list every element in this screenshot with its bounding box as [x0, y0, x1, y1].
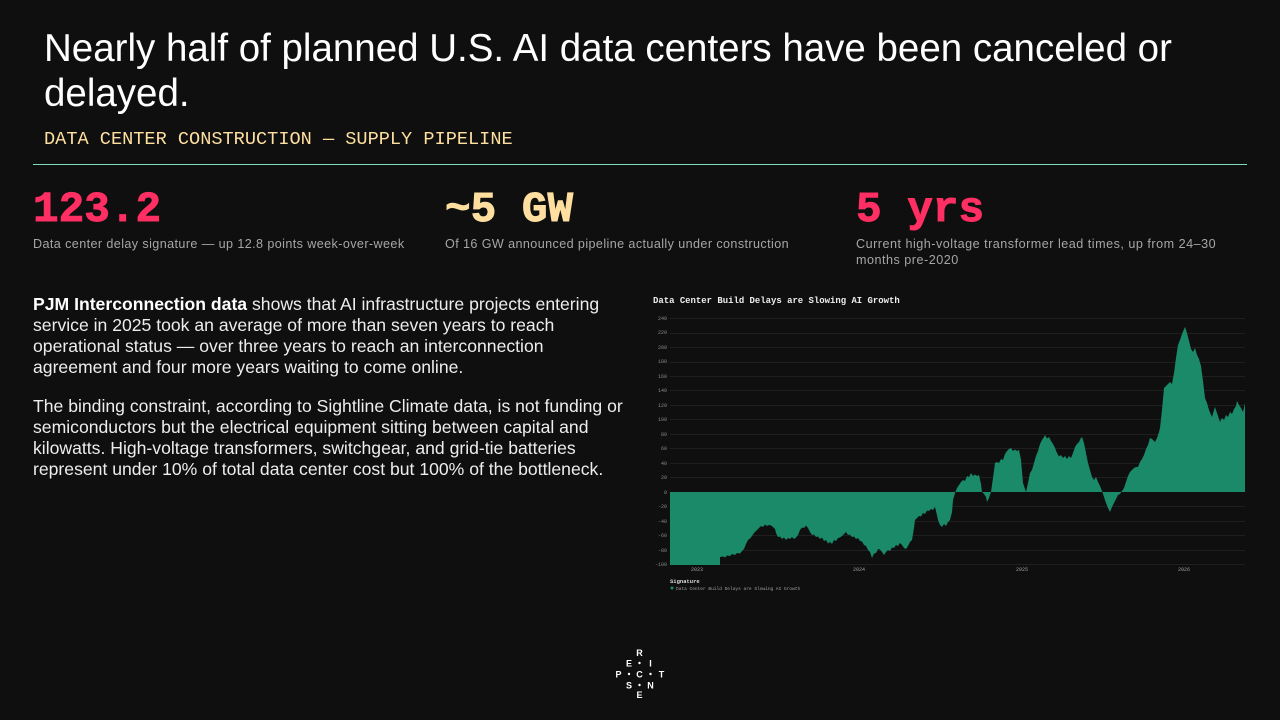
stat: under construction [445, 185, 789, 251]
y axis labels: 20 [661, 475, 667, 481]
y axis labels: -20 [658, 504, 667, 510]
x axis labels: 2026 [1178, 567, 1190, 573]
stat value: 123.2 [33, 185, 161, 234]
stat: transformer lead times [856, 185, 1216, 267]
title [44, 27, 1172, 115]
y axis labels: 60 [661, 446, 667, 452]
x axis labels: 2024 [853, 567, 865, 573]
x axis labels: 2023 [691, 567, 703, 573]
logo: wordmark grid: C [636, 670, 643, 680]
subtitle: DATA CENTER CONSTRUCTION — SUPPLY PIPELINE [44, 129, 513, 150]
logo: wordmark grid: P [615, 670, 622, 680]
x axis labels [691, 567, 1190, 573]
stat caption: months pre-2020 [856, 253, 959, 267]
y axis labels: 120 [658, 403, 667, 409]
y axis labels: -100 [655, 562, 667, 568]
y axis labels: 100 [658, 417, 667, 423]
text block: PJM data: operational status — over three years to reach an interconnection [33, 336, 544, 356]
text block: PJM data [33, 294, 599, 377]
text block: binding constraint: represent under 10% of total data center cost but 100% of the bottleneck. [33, 459, 603, 479]
chart title: Data Center Build Delays are Slowing AI Growth [653, 296, 900, 306]
signature area series [670, 327, 1245, 565]
logo: wordmark grid: I [649, 658, 652, 668]
text block: PJM data: service in 2025 took an average of more than seven years to reach [33, 315, 554, 335]
logo: wordmark grid: E [626, 658, 632, 668]
text block: binding constraint: The binding constraint, according to Sightline Climate data, is not funding or [33, 396, 623, 416]
title: Nearly half of planned U.S. AI data centers have been canceled or [44, 27, 1172, 70]
stat caption: Of 16 GW announced pipeline actually under construction [445, 237, 789, 251]
y axis labels: 180 [658, 359, 667, 365]
logo: wordmark grid: N [647, 680, 654, 690]
stat value: 5 yrs [856, 185, 984, 234]
y axis labels: 0 [664, 490, 667, 496]
legend [670, 578, 801, 592]
legend: Data Center Build Delays are Slowing AI Growth [676, 586, 801, 592]
text block: binding constraint [33, 396, 623, 479]
y axis labels: 160 [658, 374, 667, 380]
text block: binding constraint: kilowatts. High-voltage transformers, switchgear, and grid-tie batteries [33, 438, 576, 458]
area chart [653, 296, 1245, 592]
logo: wordmark grid: R [636, 648, 643, 658]
x axis labels: 2025 [1016, 567, 1028, 573]
y axis labels: -80 [658, 548, 667, 554]
y axis labels: 40 [661, 461, 667, 467]
stat caption: Data center delay signature — up 12.8 points week-over-week [33, 237, 405, 251]
logo: wordmark grid [615, 648, 665, 700]
y axis labels: 140 [658, 388, 667, 394]
legend: Signature [670, 578, 700, 585]
logo: wordmark grid: S [626, 680, 632, 690]
y axis labels: 220 [658, 330, 667, 336]
y axis labels: 80 [661, 432, 667, 438]
stat value: ~5 GW [445, 185, 573, 234]
y axis labels: 200 [658, 345, 667, 351]
title: delayed. [44, 72, 190, 115]
y axis labels: -40 [658, 519, 667, 525]
text block: PJM data: PJM Interconnection data shows that AI infrastructure projects entering [33, 294, 599, 314]
y axis labels [655, 316, 667, 568]
y axis labels: 240 [658, 316, 667, 322]
text block: binding constraint: semiconductors but the electrical equipment sitting between capital and [33, 417, 589, 437]
logo: wordmark grid: E [636, 690, 643, 700]
stat caption: Current high-voltage transformer lead times, up from 24–30 [856, 237, 1216, 251]
text block: PJM data: agreement and four more years waiting to come online. [33, 357, 463, 377]
y axis labels: -60 [658, 533, 667, 539]
stat: delay signature [33, 185, 405, 251]
logo: wordmark grid: T [659, 670, 665, 680]
stat caption [856, 237, 1216, 267]
